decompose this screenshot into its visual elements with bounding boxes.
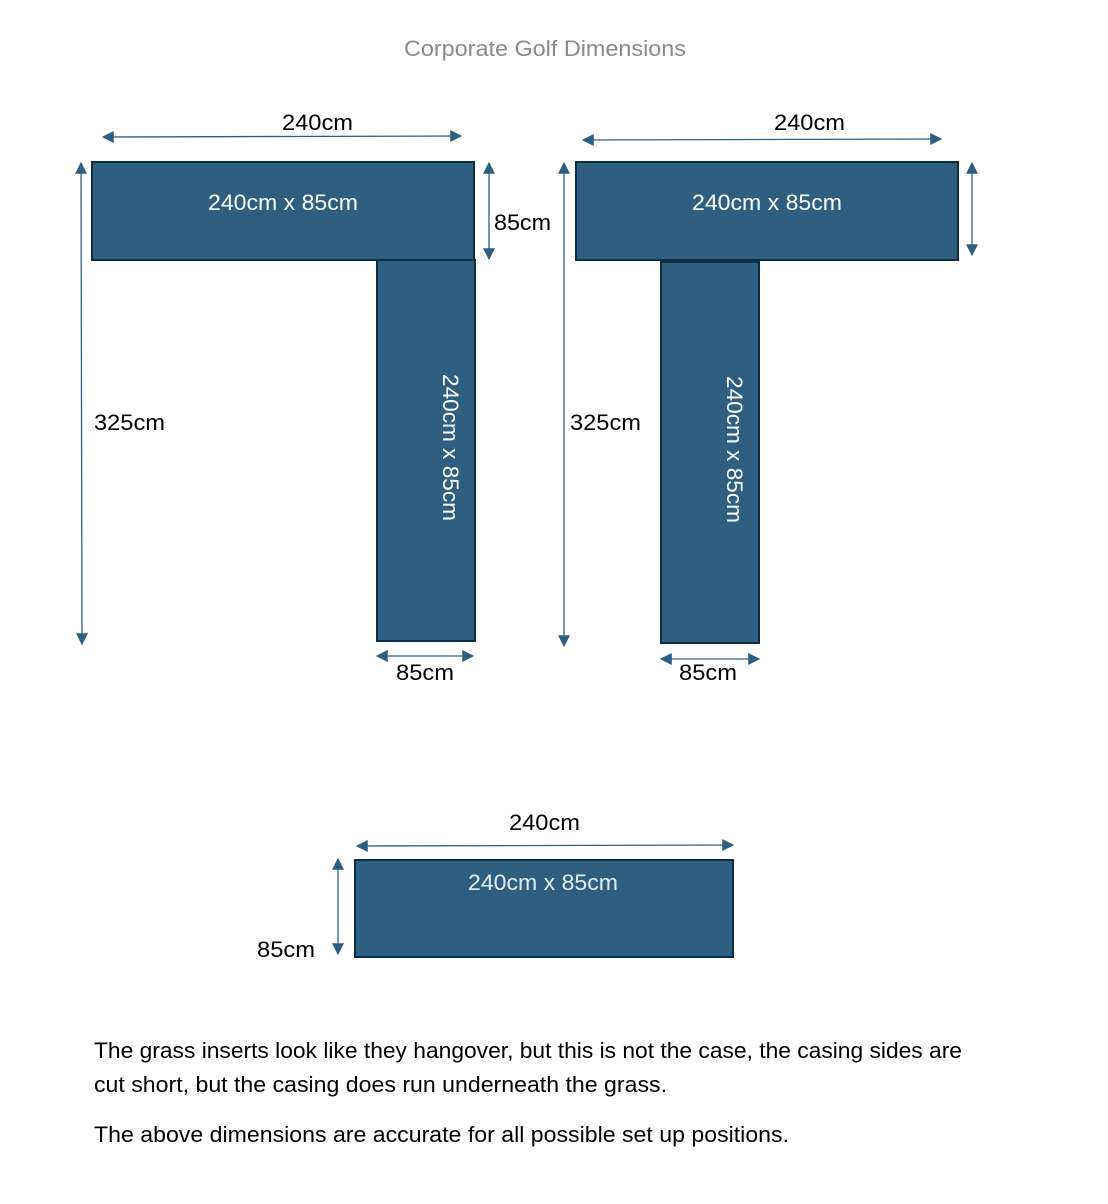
dimension: right height <box>489 163 551 259</box>
dimension: bottom width: 85cm <box>679 660 737 685</box>
panel: left L layout <box>81 110 551 685</box>
vertical grass insert <box>661 262 759 643</box>
vertical grass insert <box>377 260 475 641</box>
text block: note about grass inserts <box>94 1038 962 1097</box>
dimension: top width: 240cm <box>282 110 353 135</box>
dimension: height: 85cm <box>257 937 315 962</box>
dimension: height <box>257 859 338 962</box>
horizontal grass insert <box>92 162 474 260</box>
text block: note about grass inserts: The grass inserts look like they hangover, but this is not the case, the casing sides are <box>94 1038 962 1063</box>
panel: right T layout <box>564 110 972 685</box>
dimension: bottom width <box>377 656 473 685</box>
horizontal grass insert: 240cm x 85cm <box>692 190 842 215</box>
panel: single straight layout <box>257 810 733 962</box>
dimension: bottom width: 85cm <box>396 660 454 685</box>
horizontal grass insert: 240cm x 85cm <box>208 190 358 215</box>
dimension: total height: 325cm <box>94 410 165 435</box>
horizontal grass insert <box>576 162 958 260</box>
vertical grass insert: 240cm x 85cm <box>722 376 747 523</box>
dimension: top width: 240cm <box>774 110 845 135</box>
dimension: right height: 85cm <box>494 210 551 235</box>
text block: note about grass inserts: cut short, but the casing does run underneath the grass. <box>94 1072 667 1097</box>
title: Corporate Golf Dimensions <box>404 36 686 61</box>
dimension: total height: 325cm <box>570 410 641 435</box>
dimension: right height <box>971 163 973 255</box>
dimension: bottom width <box>661 659 759 685</box>
text block: accuracy note: The above dimensions are accurate for all possible set up positions. <box>94 1122 789 1147</box>
vertical grass insert: 240cm x 85cm <box>438 374 463 521</box>
dimension: width: 240cm <box>509 810 580 835</box>
grass insert <box>355 860 733 957</box>
grass insert: 240cm x 85cm <box>468 870 618 895</box>
